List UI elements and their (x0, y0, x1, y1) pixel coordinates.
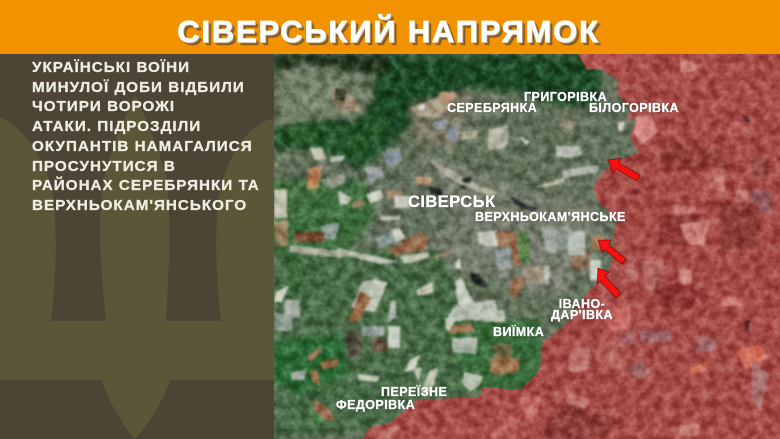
body text: УКРАЇНСЬКІ ВОЇНИ (32, 59, 190, 76)
arrow 1 (608, 158, 640, 181)
arrow 2 (598, 240, 626, 264)
arrow 3 (597, 268, 621, 298)
label: Переїзне: ПЕРЕЇЗНЕ (381, 385, 447, 399)
label: Федорівка: ФЕДОРІВКА (336, 398, 415, 412)
body text: ОКУПАНТІВ НАМАГАЛИСЯ (32, 138, 253, 155)
label: Серебрянка: СЕРЕБРЯНКА (447, 101, 537, 115)
body text: РАЙОНАХ СЕРЕБРЯНКИ ТА (32, 177, 260, 194)
red occupied territory overlay (363, 54, 780, 439)
body text: ЧОТИРИ ВОРОЖІ (32, 98, 175, 115)
photo grain texture (274, 54, 780, 439)
body text (32, 59, 260, 214)
body text: АТАКИ. ПІДРОЗДІЛИ (32, 118, 201, 135)
red zone field texture (378, 54, 772, 439)
body text: ПРОСУНУТИСЯ В (32, 158, 176, 175)
label: Іваново-Дар'ївка: ІВАНО- (559, 297, 605, 311)
label: Верхньокам'янське: ВЕРХНЬОКАМ'ЯНСЬКЕ (475, 210, 626, 224)
label: Виїмка: ВИЇМКА (493, 325, 544, 339)
body text: МИНУЛОЇ ДОБИ ВІДБИЛИ (32, 79, 245, 96)
label: Іваново-Дар'ївка (550, 297, 613, 322)
label: Білогорівка: БІЛОГОРІВКА (589, 101, 679, 115)
background trident emblem (0, 96, 274, 438)
map panel: satellite image with front line (274, 54, 780, 439)
label: Сіверськ: СІВЕРСЬК (408, 193, 495, 211)
label: Іваново-Дар'ївка: ДАР'ІВКА (551, 308, 613, 322)
terrain base patches (274, 54, 610, 439)
title: СІВЕРСЬКИЙ НАПРЯМОК (177, 14, 600, 49)
title bar (0, 0, 780, 54)
body text: ВЕРХНЬОКАМ'ЯНСЬКОГО (32, 197, 247, 214)
fields and settlements (274, 77, 625, 424)
label: Григорівка: ГРИГОРІВКА (524, 90, 607, 104)
